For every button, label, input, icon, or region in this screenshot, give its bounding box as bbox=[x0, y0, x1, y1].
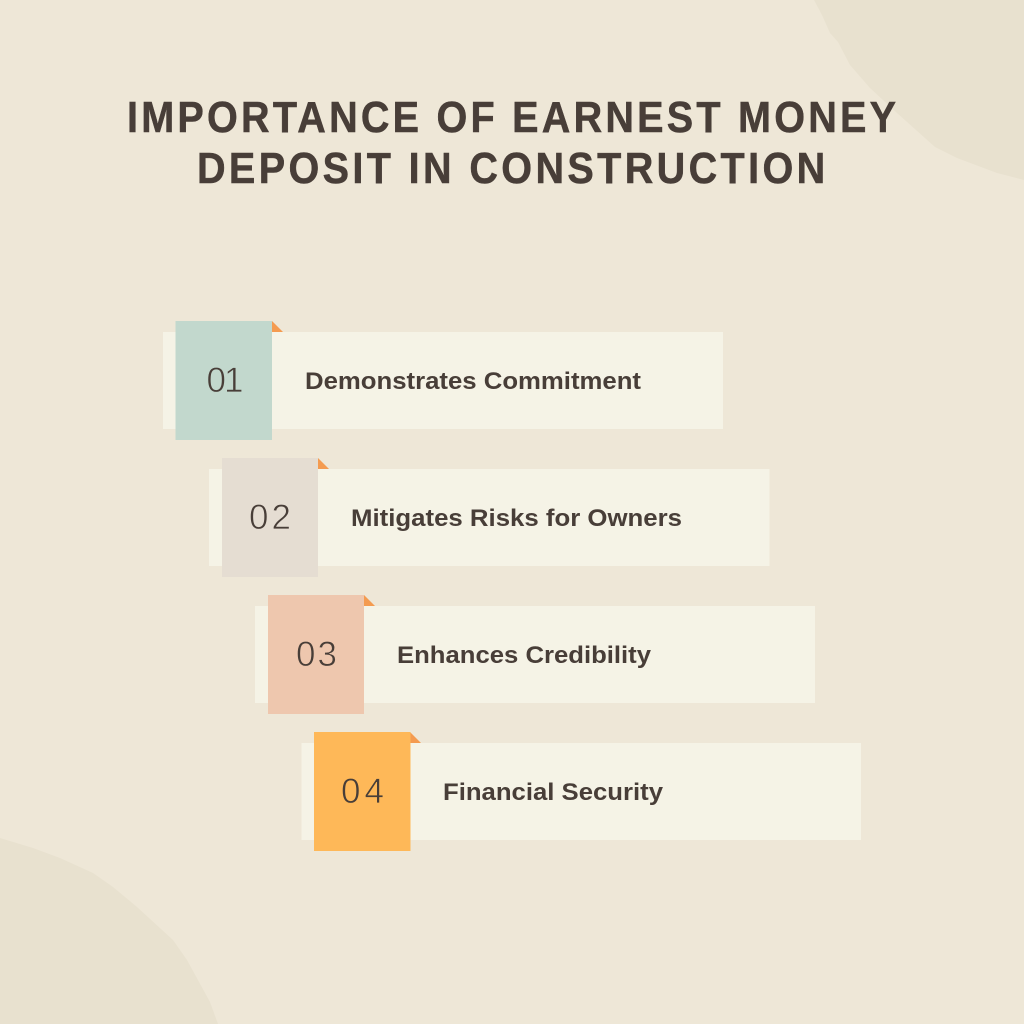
item 01: Demonstrates Commitment: Demonstrates Commitment bbox=[305, 368, 641, 395]
item 04: Financial Security: Financial Security bbox=[443, 779, 664, 806]
item 01: Demonstrates Commitment bbox=[163, 321, 723, 440]
background blob: bottom left bbox=[0, 838, 218, 1024]
title: DEPOSIT IN CONSTRUCTION bbox=[197, 143, 825, 192]
title: IMPORTANCE OF EARNEST MONEY bbox=[127, 92, 896, 141]
item 02: Mitigates Risks for Owners bbox=[209, 458, 770, 577]
item 03: Enhances Credibility: Enhances Credibility bbox=[397, 642, 652, 669]
item 04: Financial Security: 04 bbox=[341, 772, 384, 811]
item 03: Enhances Credibility bbox=[255, 595, 815, 714]
background blob: top right bbox=[814, 0, 1024, 180]
title bbox=[127, 92, 896, 192]
item 03: Enhances Credibility: 03 bbox=[296, 635, 337, 674]
item 02: Mitigates Risks for Owners: 02 bbox=[249, 498, 291, 537]
item 02: Mitigates Risks for Owners: Mitigates Risks for Owners bbox=[351, 505, 682, 532]
item 04: Financial Security bbox=[302, 732, 861, 851]
item 01: Demonstrates Commitment: 01 bbox=[206, 361, 243, 400]
